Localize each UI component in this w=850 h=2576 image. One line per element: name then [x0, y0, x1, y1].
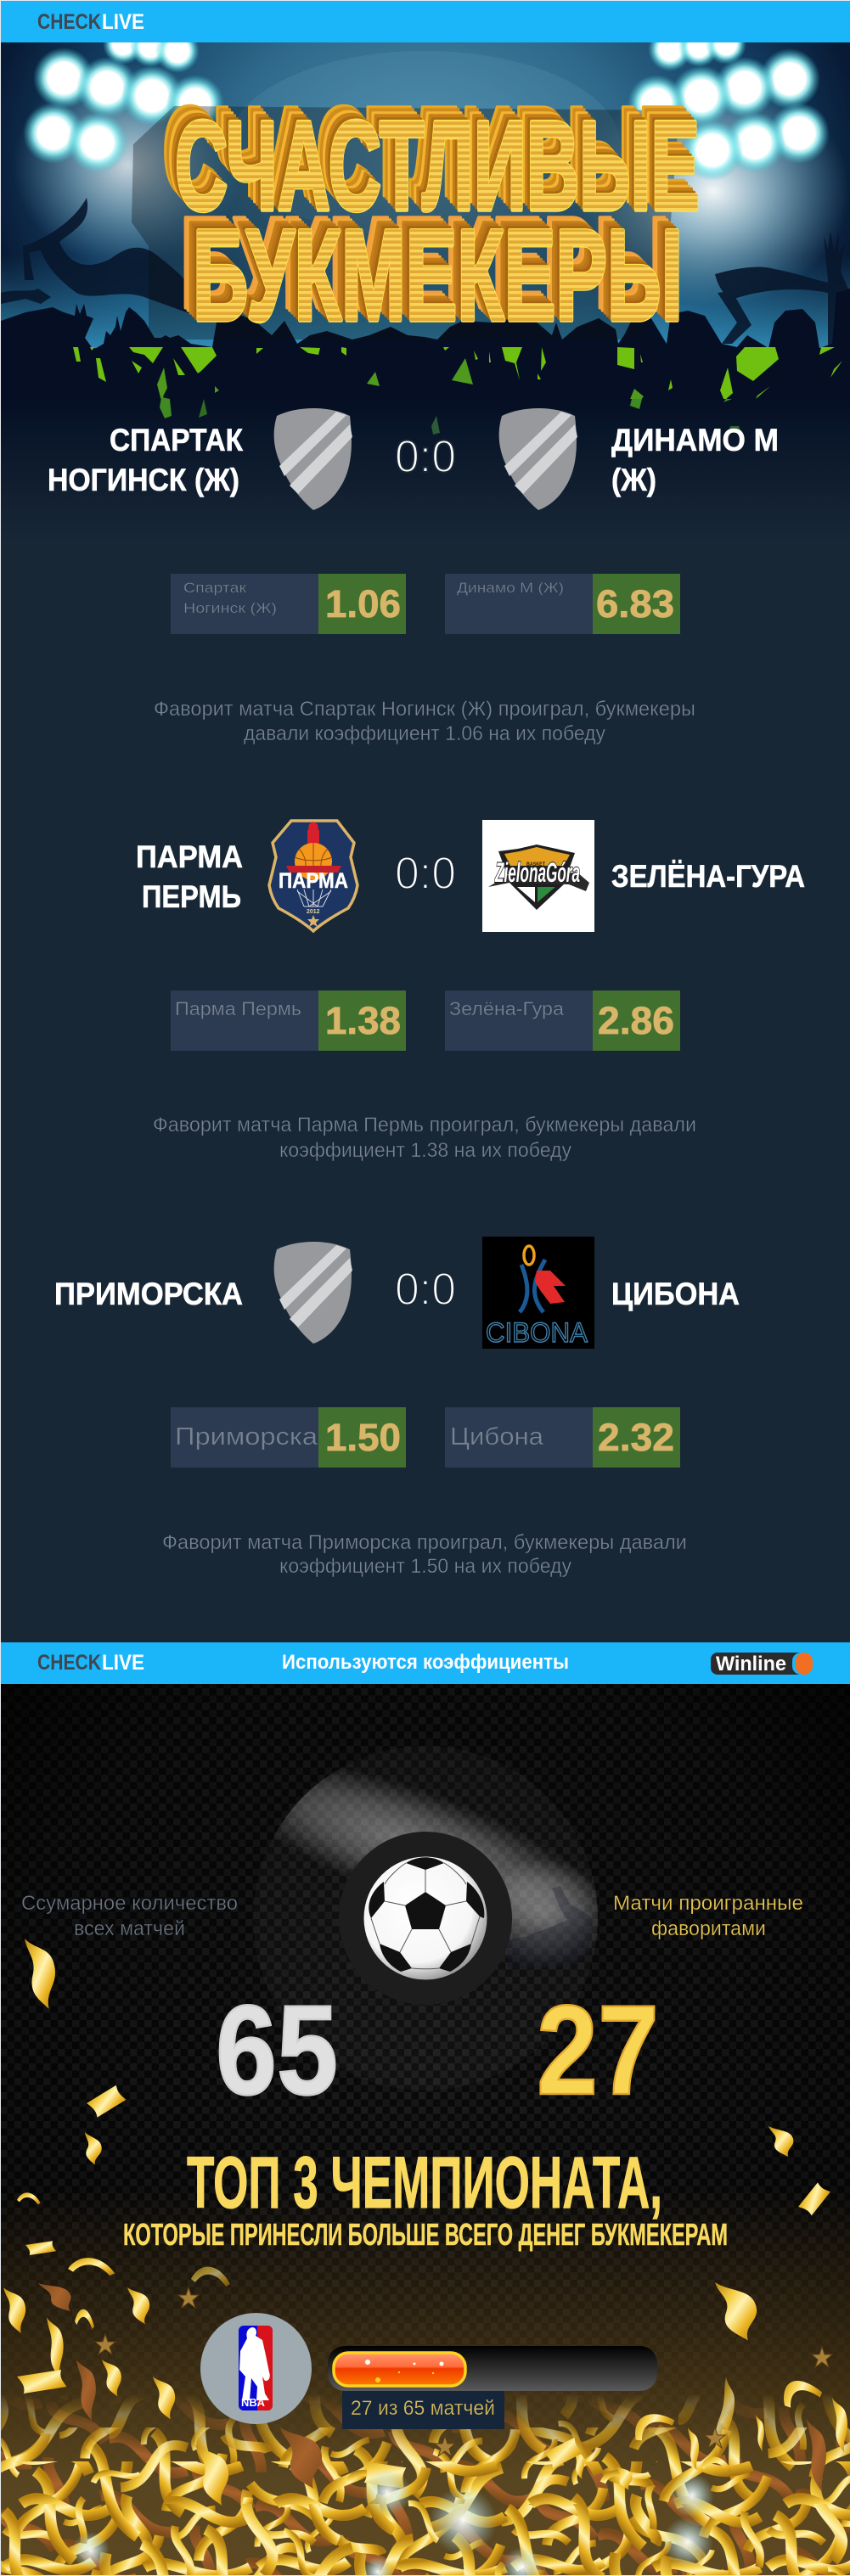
match summary: Фаворит матча Спартак Ногинск (Ж) проиграл, букмекеры	[154, 698, 695, 721]
logo: Parma: 2012	[307, 909, 320, 915]
ball badge	[339, 1832, 512, 2005]
hero banner: stadium lights and crowd	[1, 24, 850, 407]
lower panel background	[1, 1684, 850, 2576]
away team name: ДИНАМО М	[611, 423, 779, 457]
top header bar	[1, 1, 850, 42]
stat: favourites lost	[537, 1892, 803, 2121]
progress bar	[328, 2346, 657, 2391]
bar caption: Используются коэффициенты	[282, 1651, 569, 1674]
away team name: (Ж)	[611, 463, 656, 497]
away odds card: 6.83	[596, 582, 674, 626]
match summary	[153, 1114, 696, 1162]
progress fill	[334, 2353, 465, 2386]
championship row: NBA	[200, 2313, 657, 2429]
score: 0:0	[395, 1264, 456, 1315]
stat: total matches	[21, 1892, 338, 2121]
dark disc	[339, 1832, 512, 2005]
away odds card: 2.86	[598, 999, 674, 1042]
section heading	[123, 2142, 728, 2252]
match summary	[154, 698, 695, 745]
number 65: 65	[216, 1978, 338, 2121]
logo: CheckLive: CHECK	[37, 10, 101, 34]
home odds card	[171, 991, 406, 1051]
green pitch visible through the crowd	[73, 347, 842, 407]
NBA badge	[200, 2313, 312, 2424]
logo: Winline: Winline	[716, 1653, 786, 1675]
stat: total matches: Ссумарное количество	[21, 1892, 238, 1915]
home team name: ПЕРМЬ	[142, 879, 241, 914]
score: 0:0	[395, 848, 456, 899]
light sweep behind ball	[273, 1767, 598, 1969]
fade below hero	[1, 399, 850, 543]
logo: Zielona Gora: ZielonaGóra	[494, 857, 580, 888]
hero title	[132, 80, 700, 348]
match 3	[54, 1237, 740, 1578]
home team name: НОГИНСК (Ж)	[48, 463, 239, 497]
sparkles	[72, 2469, 714, 2576]
home odds card: Парма Пермь	[175, 998, 301, 1019]
home odds card: Спартак	[183, 580, 247, 596]
stat: favourites lost: фаворитами	[651, 1917, 766, 1940]
logo: Cibona: CIBONA	[486, 1317, 588, 1348]
match 2	[136, 820, 805, 1162]
gold confetti	[1, 1939, 850, 2576]
home odds card: Ногинск (Ж)	[183, 600, 277, 616]
home odds card: 1.38	[325, 999, 401, 1042]
home team name: СПАРТАК	[110, 423, 243, 457]
progress label	[342, 2391, 504, 2429]
home odds card: Приморска	[175, 1423, 318, 1451]
away odds card: 2.32	[598, 1416, 674, 1459]
icon: soccer ball	[363, 1857, 487, 1979]
match summary: Фаворит матча Приморска проиграл, букмекеры давали	[162, 1531, 687, 1554]
stadium floodlights	[23, 24, 830, 181]
logo: Zielona Gora: BASKET	[526, 862, 545, 867]
match 1	[48, 408, 779, 745]
fans silhouette	[506, 1886, 594, 1958]
logo: CheckLive: CHECK	[37, 1651, 101, 1675]
title shadow	[132, 106, 679, 340]
home shield	[274, 1242, 352, 1344]
stat: favourites lost: Матчи проигранные	[613, 1892, 803, 1915]
away team name	[611, 423, 779, 497]
second header bar	[1, 1642, 850, 1684]
page background	[0, 0, 850, 1685]
away odds card	[445, 991, 680, 1051]
crowd silhouette	[1, 289, 850, 399]
away odds card	[445, 574, 680, 634]
away shield	[499, 408, 577, 510]
match summary: коэффициент 1.50 на их победу	[279, 1555, 571, 1578]
progress label: 27 из 65 матчей	[351, 2397, 495, 2420]
home team name	[136, 839, 243, 914]
logo: Cibona	[482, 1237, 594, 1349]
away odds card	[445, 1407, 680, 1468]
home team name: ПРИМОРСКА	[54, 1277, 243, 1311]
match summary: коэффициент 1.38 на их победу	[279, 1139, 571, 1162]
home team name: ПАРМА	[136, 839, 243, 874]
logo: Parma: ПАРМА	[279, 869, 348, 893]
crowd flags	[1, 198, 850, 356]
logo: CheckLive: LIVE	[102, 10, 144, 34]
logo: Parma	[269, 821, 357, 931]
home odds card	[171, 574, 406, 634]
match summary: Фаворит матча Парма Пермь проиграл, букмекеры давали	[153, 1114, 696, 1136]
away odds card: Цибона	[450, 1423, 544, 1451]
home team name	[48, 423, 243, 497]
logo: Zielona Gora	[482, 820, 594, 932]
home odds card	[171, 1407, 406, 1468]
away team name: ЗЕЛЁНА-ГУРА	[611, 859, 805, 894]
NBA badge: NBA	[241, 2396, 266, 2409]
match summary: давали коэффициент 1.06 на их победу	[244, 722, 605, 745]
stray green crowd gaps	[160, 397, 741, 435]
number 27: 27	[537, 1978, 659, 2121]
away team name: ЦИБОНА	[611, 1277, 740, 1311]
home odds card: 1.50	[325, 1416, 401, 1459]
home odds card: 1.06	[325, 582, 401, 626]
match summary	[162, 1531, 687, 1578]
score: 0:0	[395, 431, 456, 482]
away odds card: Зелёна-Гура	[449, 998, 565, 1019]
logo: CheckLive: LIVE	[102, 1651, 144, 1675]
home shield	[274, 408, 352, 510]
away odds card: Динамо М (Ж)	[457, 580, 564, 596]
stat: total matches: всех матчей	[74, 1917, 185, 1940]
